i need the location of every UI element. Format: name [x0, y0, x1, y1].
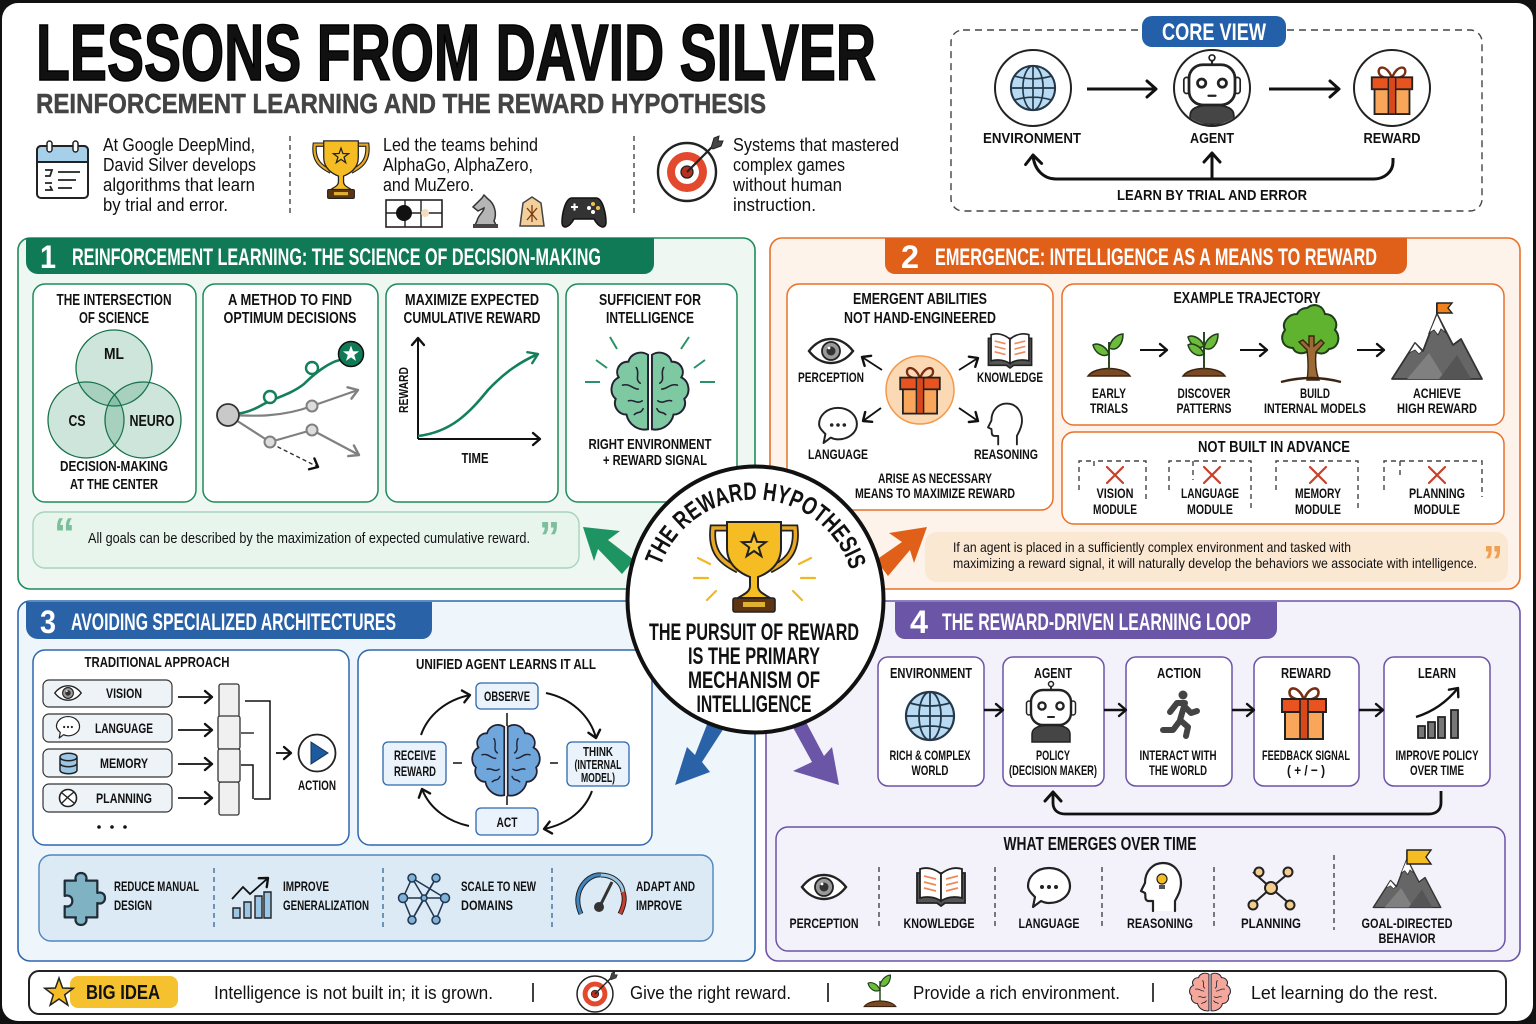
card: example trajectory: [1062, 284, 1504, 425]
step: receive reward: REWARD: [394, 763, 436, 779]
icon: environment: [995, 50, 1071, 126]
module: language: LANGUAGE: [95, 720, 153, 736]
intro item: target: [658, 135, 899, 215]
card caption: + REWARD SIGNAL: [603, 452, 707, 469]
icon: chess knight: [473, 195, 498, 228]
icon: sprout: [864, 975, 896, 1006]
benefit: reduce manual design: [114, 878, 199, 913]
central hypothesis badge: [626, 464, 886, 734]
arrow: to panel 4: [790, 722, 839, 785]
panel 1: reinforcement learning: [18, 238, 755, 589]
loop step: reward: REWARD: [1281, 665, 1331, 682]
venn labels: ML: [104, 346, 124, 363]
card caption: RIGHT ENVIRONMENT: [588, 436, 712, 453]
benefit: reduce manual design: DESIGN: [114, 897, 152, 913]
icon: target: [577, 972, 617, 1012]
outcome: goal-directed behavior: GOAL-DIRECTED: [1362, 915, 1452, 931]
venn labels: CS: [68, 413, 86, 430]
intro text 2: [383, 135, 538, 195]
card caption: AT THE CENTER: [70, 476, 158, 493]
loop step: learn: [1384, 657, 1490, 786]
card: traditional approach: [33, 650, 349, 845]
card: cumulative reward: [386, 284, 558, 502]
panel 1 header: 1: [40, 239, 56, 275]
intro text 1: by trial and error.: [103, 195, 228, 215]
venn labels: NEURO: [130, 413, 174, 430]
module: vision: VISION: [106, 685, 142, 701]
panel 2 header: 2: [901, 239, 919, 275]
section title: WHAT EMERGES OVER TIME: [1004, 834, 1196, 854]
intro text 3: [732, 135, 899, 215]
message: right reward: Give the right reward.: [630, 983, 791, 1003]
card caption: MEANS TO MAXIMIZE REWARD: [855, 485, 1015, 501]
card title: TRADITIONAL APPROACH: [84, 654, 230, 671]
panel 3: avoiding specialized architectures: [18, 601, 755, 961]
arrow: to panel 3: [675, 722, 724, 785]
card title: OF SCIENCE: [79, 310, 149, 327]
inner connectors: [453, 713, 558, 805]
step: achieve high reward: HIGH REWARD: [1397, 400, 1477, 416]
arrow: agent to reward: [1269, 88, 1339, 90]
benefit: adapt and improve: ADAPT AND: [636, 878, 695, 894]
module: vision: VISION: [1096, 485, 1134, 501]
icon: gauge: [578, 875, 624, 914]
benefits strip: [39, 855, 713, 941]
badge arc title: THE REWARD HYPOTHESIS: [644, 482, 866, 568]
ability: perception: [798, 339, 864, 385]
panel 4: learning loop: [766, 601, 1520, 961]
icon: puzzle piece: [65, 873, 105, 925]
ability: knowledge: KNOWLEDGE: [977, 369, 1043, 385]
step: early trials: EARLY: [1092, 385, 1126, 401]
benefit: adapt and improve: [636, 878, 695, 913]
benefit: scale to new domains: DOMAINS: [461, 897, 513, 913]
core view badge: CORE VIEW: [1162, 19, 1266, 46]
intro text 2: AlphaGo, AlphaZero,: [383, 155, 533, 175]
intro text 1: [103, 135, 256, 215]
title: LESSONS FROM DAVID SILVER: [36, 8, 876, 97]
step: act: ACT: [496, 814, 518, 830]
intro item: DeepMind calendar: [37, 135, 256, 215]
step: think: (INTERNAL: [574, 757, 622, 772]
card title: SUFFICIENT FOR: [599, 292, 701, 309]
step: build internal models: INTERNAL MODELS: [1264, 400, 1366, 416]
loop step: agent: [1003, 657, 1104, 786]
venn diagram: [48, 330, 181, 458]
quote: sufficiently complex environment: If an agent is placed in a sufficiently complex environment and tasked with: [953, 539, 1351, 555]
axis label: time: TIME: [462, 450, 488, 467]
loop step: reward: FEEDBACK SIGNAL: [1262, 747, 1350, 763]
card: not built in advance: [1062, 432, 1504, 524]
card title: MAXIMIZE EXPECTED: [405, 292, 539, 309]
icon: star: [45, 978, 73, 1005]
panel 4 header: [895, 602, 1277, 640]
intro text 1: algorithms that learn: [103, 175, 255, 195]
module: planning: [43, 784, 172, 812]
step: think: MODEL): [581, 770, 615, 785]
card: emergent abilities: [787, 284, 1053, 510]
card title: NOT HAND-ENGINEERED: [844, 310, 996, 327]
badge statement: MECHANISM OF: [688, 667, 820, 694]
badge statement: INTELLIGENCE: [696, 691, 812, 718]
outcome: reasoning: [1127, 863, 1193, 931]
step: early trials: TRIALS: [1090, 400, 1128, 416]
loop caption: LEARN BY TRIAL AND ERROR: [1117, 187, 1307, 204]
core view labels: ENVIRONMENT: [983, 130, 1081, 147]
panel 3 header: AVOIDING SPECIALIZED ARCHITECTURES: [71, 609, 396, 636]
core view badge: [1142, 16, 1286, 47]
module: memory: MEMORY: [100, 755, 149, 771]
trophy rays: [694, 558, 815, 600]
benefit: improve generalization: IMPROVE: [283, 878, 329, 894]
panel: what emerges over time: [776, 827, 1505, 951]
connector lines: [241, 701, 270, 799]
card title: OPTIMUM DECISIONS: [224, 310, 357, 327]
core view labels: REWARD: [1364, 130, 1421, 147]
action label: ACTION: [298, 777, 336, 793]
card title: [404, 292, 540, 327]
module: planning: PLANNING: [1409, 485, 1465, 501]
step: receive reward: RECEIVE: [394, 747, 436, 763]
badge statement: IS THE PRIMARY: [688, 643, 820, 670]
icon: reward: [1354, 50, 1430, 126]
card title: THE INTERSECTION: [56, 292, 172, 309]
panel 4 header: THE REWARD-DRIVEN LEARNING LOOP: [942, 609, 1251, 636]
quote: goals: [33, 509, 579, 568]
module: memory: [43, 749, 172, 777]
icon: brain: [612, 353, 688, 430]
card: unified agent: [358, 650, 652, 845]
outcome: perception: PERCEPTION: [790, 915, 858, 931]
module: memory: [1276, 461, 1358, 517]
message: let learning: Let learning do the rest.: [1251, 983, 1438, 1003]
outcome: knowledge: [904, 868, 974, 931]
outcome: planning: PLANNING: [1241, 915, 1301, 931]
step label: discover patterns: [1176, 385, 1232, 416]
card title: [844, 291, 996, 327]
loop step: agent: AGENT: [1034, 665, 1072, 682]
arrow: to panel 1: [583, 527, 634, 574]
benefit: adapt and improve: IMPROVE: [636, 897, 682, 913]
badge statement: [649, 619, 859, 718]
arrow: trial and error loop: [1033, 153, 1393, 179]
icon: network: [398, 874, 450, 924]
module: planning: [1384, 461, 1482, 517]
panel 3 header: [26, 602, 432, 640]
module: vision: [1079, 461, 1146, 517]
icon: agent: [1174, 50, 1250, 126]
icon: trophy: [314, 141, 368, 198]
benefit: scale to new domains: [461, 878, 537, 913]
card caption: [60, 458, 168, 493]
core view labels: AGENT: [1190, 130, 1234, 147]
icon: rising chart: [232, 878, 271, 918]
card title: EXAMPLE TRAJECTORY: [1174, 290, 1321, 307]
outcome: perception: [790, 875, 858, 931]
intro text 3: instruction.: [733, 195, 816, 215]
loop step: action: [1126, 657, 1232, 786]
module: vision: [43, 680, 172, 707]
benefit: improve generalization: [283, 878, 369, 913]
panel 3 header: 3: [40, 604, 56, 640]
core view labels: [983, 130, 1421, 147]
quote: goals: All goals can be described by the maximization of expected cumulative reward.: [88, 530, 530, 547]
subtitle: REINFORCEMENT LEARNING AND THE REWARD HYPOTHESIS: [36, 88, 766, 119]
intro text 2: and MuZero.: [383, 175, 474, 195]
step label: discover patterns: DISCOVER: [1178, 385, 1230, 401]
module: planning: MODULE: [1414, 501, 1460, 517]
arrow: environment to agent: [1087, 88, 1156, 90]
card title: [599, 292, 701, 327]
message: not built in: Intelligence is not built in; it is grown.: [214, 983, 493, 1003]
ability arrows: [862, 357, 978, 421]
module: vision: MODULE: [1093, 501, 1137, 517]
outcome: planning: [1241, 868, 1301, 931]
outcome: language: LANGUAGE: [1018, 915, 1080, 931]
icon: shogi piece: [520, 197, 544, 226]
step: achieve high reward: [1392, 303, 1482, 416]
ability: language: [808, 408, 868, 462]
trajectory arrows: [1140, 349, 1384, 351]
quote: sufficiently complex environment: [925, 532, 1508, 586]
icon: blue brain: [472, 725, 540, 796]
card title: NOT BUILT IN ADVANCE: [1198, 439, 1350, 456]
loop step: action: ACTION: [1157, 665, 1201, 682]
loop step: learn: LEARN: [1418, 665, 1456, 682]
card title: [56, 292, 172, 327]
icon: action: [298, 734, 336, 772]
card: sufficient for intelligence: [566, 284, 737, 502]
ability: reasoning: REASONING: [974, 446, 1038, 462]
card title: INTELLIGENCE: [606, 310, 694, 327]
module: language: [43, 714, 172, 742]
panel 2: emergence: [770, 238, 1520, 589]
loop step: action: INTERACT WITH: [1140, 747, 1216, 763]
icon: central gift: [886, 356, 954, 424]
card title: A METHOD TO FIND: [228, 292, 352, 309]
quote: sufficiently complex environment: ”: [1483, 537, 1503, 586]
benefit: scale to new domains: SCALE TO NEW: [461, 878, 537, 894]
venn labels: [68, 346, 174, 430]
benefit: reduce manual design: REDUCE MANUAL: [114, 878, 199, 894]
step: build internal models: BUILD: [1300, 385, 1330, 401]
step: early trials: [1088, 334, 1130, 416]
loop arrows: [421, 693, 596, 829]
arrow: to panel 2: [876, 527, 927, 576]
panel 2 header: [885, 238, 1407, 275]
big idea pill: BIG IDEA: [86, 982, 160, 1004]
module: language: [1169, 461, 1251, 517]
big idea bar: [29, 971, 1506, 1014]
ability: knowledge: [977, 334, 1043, 385]
panel 1 header: [26, 238, 654, 275]
input arrows: [178, 697, 212, 798]
card caption: [855, 470, 1015, 501]
connector arrow: [241, 732, 254, 734]
loop step: environment: ENVIRONMENT: [890, 665, 972, 682]
big idea pill: [70, 976, 178, 1008]
loop step: reward: [1254, 657, 1359, 786]
step: discover patterns: [1183, 332, 1225, 376]
brain rays: [585, 337, 715, 382]
card caption: DECISION-MAKING: [60, 458, 168, 475]
card caption: [588, 436, 712, 469]
loop step: learn: OVER TIME: [1410, 762, 1464, 778]
line chart: [418, 338, 540, 439]
intro text 3: complex games: [733, 155, 845, 175]
benefit: improve generalization: GENERALIZATION: [283, 897, 369, 913]
step: achieve high reward: ACHIEVE: [1413, 385, 1461, 401]
step: receive reward: [383, 742, 446, 785]
intro text 3: Systems that mastered: [733, 135, 899, 155]
intro text 1: David Silver develops: [103, 155, 256, 175]
card title: CUMULATIVE REWARD: [404, 310, 540, 327]
decision tree: [217, 342, 364, 467]
outcome: goal-directed behavior: BEHAVIOR: [1378, 930, 1436, 946]
ability: reasoning: [974, 404, 1038, 462]
loop step: agent: (DECISION MAKER): [1009, 762, 1097, 778]
step: observe: [476, 683, 538, 709]
ability: language: LANGUAGE: [808, 446, 868, 462]
step: think: THINK: [583, 744, 613, 759]
icon: target: [658, 136, 723, 201]
outcome: knowledge: KNOWLEDGE: [904, 915, 974, 931]
panel 1 header: REINFORCEMENT LEARNING: THE SCIENCE OF DECISION-MAKING: [72, 244, 601, 271]
module: language: MODULE: [1187, 501, 1233, 517]
loop step: environment: [878, 657, 984, 786]
loop step: learn: IMPROVE POLICY: [1396, 747, 1479, 763]
card caption: ARISE AS NECESSARY: [878, 470, 992, 486]
module stack: [218, 684, 240, 815]
loop step: reward: ( + / − ): [1287, 762, 1325, 778]
icon: calendar: [37, 141, 88, 198]
quote: goals: ”: [539, 513, 560, 562]
ellipsis: [97, 825, 127, 829]
arrow: learn back to agent: [1053, 791, 1441, 814]
module: memory: MEMORY: [1295, 485, 1341, 501]
card: intersection of science: [33, 284, 196, 502]
axis label: reward: REWARD: [396, 367, 411, 413]
message: rich environment: Provide a rich environment.: [913, 983, 1120, 1003]
intro text 3: without human: [732, 175, 842, 195]
icon: go board: [386, 200, 442, 227]
loop step: environment: RICH & COMPLEX: [890, 747, 971, 763]
icon: pink brain: [1190, 973, 1230, 1011]
step: think: [567, 742, 629, 786]
loop step: action: THE WORLD: [1149, 762, 1207, 778]
intro text 1: At Google DeepMind,: [103, 135, 255, 155]
outcome: goal-directed behavior: [1362, 850, 1452, 946]
loop step: environment: WORLD: [912, 762, 948, 778]
outcome: reasoning: REASONING: [1127, 915, 1193, 931]
intro text 2: Led the teams behind: [383, 135, 538, 155]
step label: discover patterns: PATTERNS: [1176, 400, 1232, 416]
card: optimum decisions: [203, 284, 378, 502]
step: act: [476, 808, 538, 835]
card title: [224, 292, 357, 327]
module: language: LANGUAGE: [1181, 485, 1239, 501]
intro item: trophy and games: [314, 135, 606, 228]
badge statement: THE PURSUIT OF REWARD: [649, 619, 859, 646]
ability: perception: PERCEPTION: [798, 369, 864, 385]
card title: EMERGENT ABILITIES: [853, 291, 987, 308]
step: observe: OBSERVE: [484, 688, 530, 704]
loop arrows: [984, 709, 1383, 711]
icon: badge trophy: [713, 522, 795, 612]
module: memory: MODULE: [1295, 501, 1341, 517]
loop step: agent: POLICY: [1036, 747, 1070, 763]
panel 4 header: 4: [910, 604, 928, 640]
arrow to action: [276, 752, 291, 754]
card title: UNIFIED AGENT LEARNS IT ALL: [416, 656, 596, 673]
panel: core view: [951, 16, 1482, 211]
module: planning: PLANNING: [96, 790, 152, 806]
outcome: language: [1018, 868, 1080, 931]
quote: goals: “: [54, 509, 75, 558]
quote: sufficiently complex environment: maximizing a reward signal, it will naturally develop the behaviors we associate with intelligence.: [953, 555, 1477, 571]
step: build internal models: [1264, 305, 1366, 416]
icon: game controller: [562, 198, 606, 227]
